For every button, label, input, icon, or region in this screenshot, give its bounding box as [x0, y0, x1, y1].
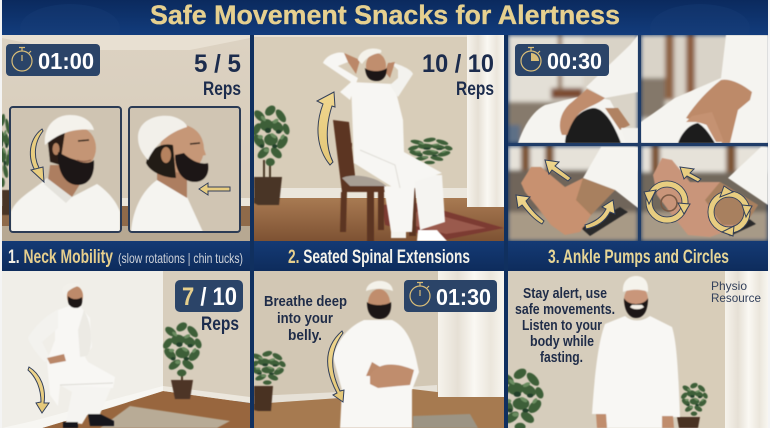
- arrow: rotation: [30, 129, 43, 176]
- rep count: 5 / 5: 5 / 5: [194, 50, 241, 78]
- photo: hand on knee left: [508, 35, 638, 143]
- panel: closing message: [497, 271, 768, 428]
- figure: seated man arms raised: [323, 48, 447, 241]
- text: breathe deep: Breathe deep: [264, 293, 347, 310]
- text: physio resource: Resource: [711, 291, 761, 305]
- label bar: seated spinal extensions: [254, 241, 504, 271]
- plant left: [508, 368, 544, 428]
- text: stay alert: safe movements.: [515, 301, 615, 318]
- timer 00:30: 00:30: [547, 48, 602, 74]
- text: stay alert: fasting.: [540, 349, 583, 366]
- panel: seated spinal extensions: [251, 35, 504, 242]
- panel: neck mobility: [0, 35, 250, 241]
- reps badge: 7 / 10: Reps: [201, 314, 239, 335]
- panel: ankle pumps and circles: [508, 35, 768, 241]
- plant behind insets: [2, 113, 9, 216]
- text: breathe deep: into your: [277, 310, 333, 327]
- plant: [254, 350, 286, 412]
- inset: neck rotation: [10, 107, 121, 232]
- timer 00:30: [515, 44, 609, 76]
- rep count: 10 / 10: [422, 50, 494, 100]
- figure: standing man smiling: [592, 276, 680, 428]
- timer 01:30: [404, 280, 497, 312]
- label bar: ankle pumps: [508, 241, 768, 271]
- rug: [381, 203, 504, 240]
- rep count: 5 / 5: Reps: [203, 79, 241, 100]
- icon: stopwatch quarter: [521, 48, 541, 71]
- icon: stopwatch: [12, 48, 32, 71]
- reps badge: 7 / 10: [175, 280, 243, 335]
- rep count: 10 / 10: 10 / 10: [422, 50, 494, 78]
- rep count: 5 / 5: [194, 50, 241, 100]
- text: physio resource: Physio: [711, 279, 747, 293]
- text: stay alert: [515, 285, 615, 366]
- panel: deep breathing: [249, 271, 504, 428]
- photo: ankle circles: [641, 146, 768, 241]
- label bar: neck mobility: [2, 241, 250, 271]
- panel: wall sit: [2, 271, 250, 428]
- text: stay alert: Listen to your: [522, 317, 602, 334]
- title: Safe Movement Snacks for Alertness: [150, 0, 620, 30]
- plant: [162, 321, 203, 399]
- label bar: neck mobility: (slow rotations | chin tucks): [118, 250, 243, 266]
- label bar: neck mobility: 1. Neck Mobility: [8, 247, 113, 268]
- text: physio resource: [711, 279, 761, 305]
- rep count: 10 / 10: Reps: [456, 79, 494, 100]
- text: breathe deep: [264, 293, 347, 344]
- arrows: circles: [649, 184, 747, 230]
- figure: wall sit man: [46, 286, 115, 428]
- arrow: breath: [328, 331, 344, 402]
- icon: stopwatch: [410, 282, 430, 306]
- panel dividers: [638, 35, 641, 241]
- rug: [100, 406, 230, 428]
- plant right: [677, 382, 709, 428]
- chair: [333, 120, 416, 242]
- reps badge: 7 / 10: 7 / 10: [182, 283, 237, 311]
- photo: hand on knee right: [641, 35, 768, 143]
- label bar: seated spinal extensions: 2. Seated Spinal Extensions: [288, 247, 470, 268]
- panel: timer 01:00: [6, 44, 100, 76]
- plant left: [251, 104, 291, 205]
- inset: chin tuck: [129, 107, 240, 232]
- text: stay alert: body while: [530, 333, 594, 350]
- arrow: extension: [317, 92, 335, 165]
- arrow: chin tuck: [199, 183, 230, 195]
- plant right: [407, 137, 454, 164]
- arrows: ankle pump: [516, 160, 615, 229]
- timer 01:30: 01:30: [436, 284, 491, 310]
- text: stay alert: Stay alert, use: [523, 285, 607, 302]
- figure: standing man hands on belly: [333, 281, 419, 428]
- arrow: wall sit: [28, 367, 49, 413]
- header banner: [2, 0, 768, 52]
- panel: timer 01:00: 01:00: [38, 48, 94, 74]
- text: breathe deep: belly.: [288, 327, 322, 344]
- photo: ankle pumps: [508, 146, 638, 241]
